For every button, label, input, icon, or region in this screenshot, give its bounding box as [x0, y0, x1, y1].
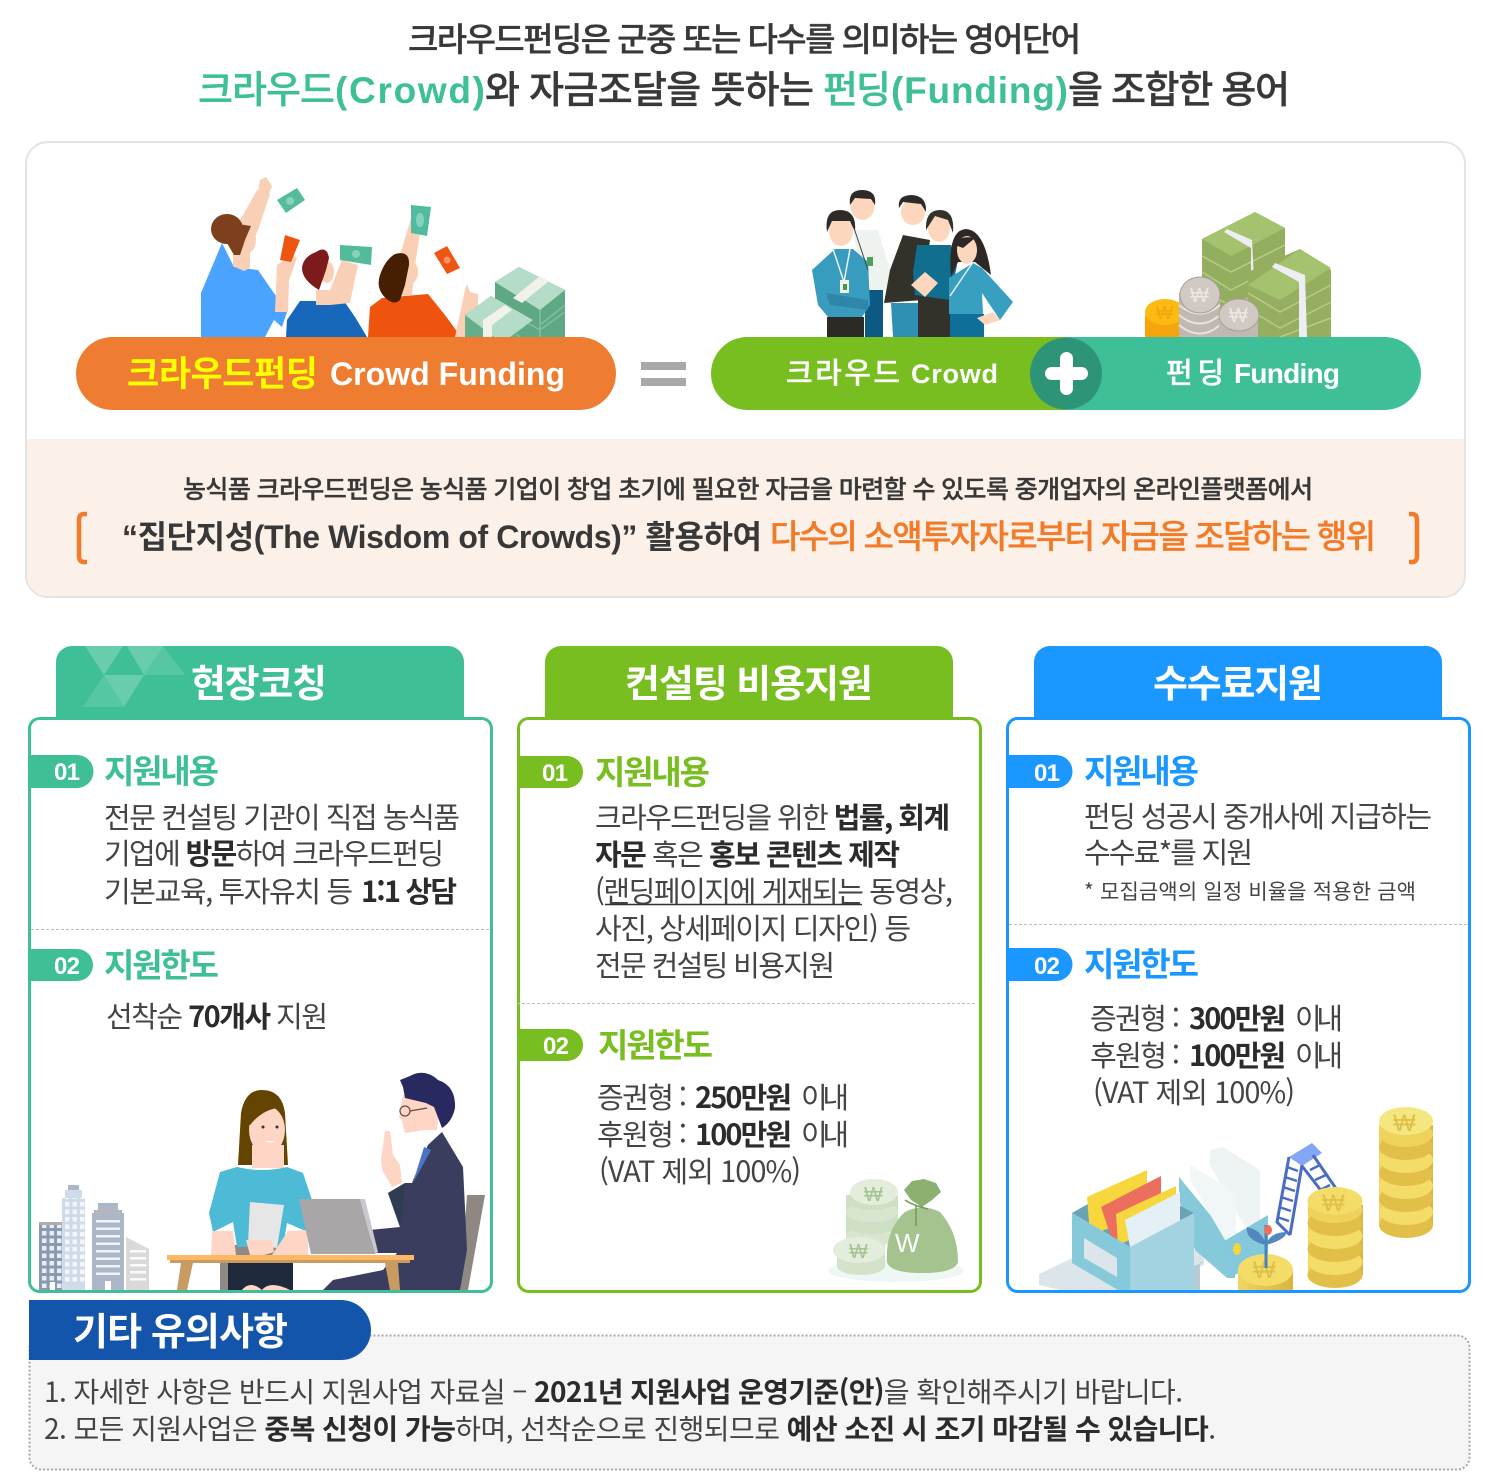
panel: consulting cost: 전문 컨설팅 비용지원 [595, 943, 835, 985]
panel: other notes [30, 1336, 1470, 1470]
illustration: crowd raising money [201, 177, 565, 337]
pill: crowd funding: Crowd Funding [330, 356, 565, 392]
definition text: 다수의 소액투자자로부터 자금을 조달하는 행위 [770, 518, 1376, 555]
panel: consulting cost [517, 646, 980, 1292]
panel: field coaching: 지원내용 [104, 753, 219, 790]
pill: crowd plus funding [711, 337, 1421, 410]
panel: consulting cost: 자문 혹은 홍보 콘텐츠 제작 [595, 832, 900, 874]
illustration: document box, ladder and coins: ₩ [1393, 1110, 1416, 1137]
panel: other notes: 1. 자세한 사항은 반드시 지원사업 자료실 – 2021년 지원사업 운영기준(안)을 확인해주시기 바랍니다. [44, 1371, 1183, 1411]
panel: consulting cost: 후원형 : [597, 1112, 687, 1154]
panel: definition [26, 142, 1465, 597]
panel: fee support: 이내 [1295, 996, 1343, 1038]
title: 와 자금조달을 뜻하는 [485, 70, 814, 112]
heading: other notes [29, 1300, 371, 1360]
panel: field coaching: 전문 컨설팅 기관이 직접 농식품 [104, 795, 460, 837]
panel: fee support: 증권형 : [1090, 996, 1180, 1038]
panel: consulting cost: 사진, 상세페이지 디자인) 등 [595, 906, 911, 948]
illustration: buildings [39, 1185, 149, 1290]
panel: fee support: 후원형 : [1090, 1033, 1180, 1075]
panel: fee support [1008, 646, 1470, 1292]
title: 크라우드펀딩은 군중 또는 다수를 의미하는 영어단어 [408, 21, 1081, 58]
panel: field coaching [30, 646, 492, 1292]
pill: crowd plus funding: 크라우드 [786, 358, 900, 390]
panel: fee support: 02 [1034, 953, 1060, 980]
panel: consulting cost: (랜딩페이지에 게재되는 동영상, [595, 869, 953, 911]
illustration: coins and bills [1145, 212, 1331, 337]
illustration: coins and bills: ₩ [1156, 303, 1173, 323]
panel: consulting cost: 컨설팅 비용지원 [625, 664, 873, 706]
panel: consulting cost: 크라우드펀딩을 위한 법률, 회계 [595, 795, 950, 837]
panel: consulting cost: 01 [542, 760, 568, 787]
illustration: money bag and coins [828, 1179, 964, 1282]
heading: other notes: 기타 유의사항 [73, 1312, 288, 1354]
title: 을 조합한 용어 [1068, 70, 1290, 112]
illustration: team of people [812, 190, 1013, 337]
illustration: document box, ladder and coins: ₩ [1322, 1190, 1345, 1217]
title: 크라우드 [198, 70, 335, 112]
panel: fee support: 이내 [1295, 1033, 1343, 1075]
panel: fee support: * 모집금액의 일정 비율을 적용한 금액 [1084, 876, 1416, 906]
illustration: document box, ladder and coins [1039, 1107, 1433, 1290]
panel: consulting cost: 이내 [801, 1075, 849, 1117]
definition text: 농식품 크라우드펀딩은 농식품 기업이 창업 초기에 필요한 자금을 마련할 수 있도록 중개업자의 온라인플랫폼에서 [183, 476, 1313, 504]
panel: consulting cost: (VAT 제외 100%) [599, 1149, 801, 1191]
panel: field coaching: 02 [54, 953, 80, 980]
panel: consulting cost: 지원내용 [595, 754, 710, 791]
panel: consulting cost: 이내 [801, 1112, 849, 1154]
panel: consulting cost: 증권형 : [597, 1075, 687, 1117]
pill: crowd plus funding: Crowd [911, 359, 998, 389]
panel: fee support: 지원한도 [1084, 946, 1199, 983]
panel: field coaching: 기본교육, 투자유치 등 [104, 869, 353, 911]
panel: consulting cost: 지원한도 [598, 1027, 713, 1064]
pill: crowd funding [76, 337, 616, 410]
panel: field coaching: 현장코칭 [191, 664, 327, 706]
panel: consulting cost: 100만원 [695, 1112, 792, 1154]
definition text [79, 476, 1417, 562]
panel: field coaching: 선착순 70개사 지원 [106, 994, 328, 1036]
illustration: money bag and coins: ₩ [864, 1184, 883, 1206]
panel: other notes: 2. 모든 지원사업은 중복 신청이 가능하며, 선착순으로 진행되므로 예산 소진 시 조기 마감될 수 있습니다. [44, 1408, 1216, 1448]
panel: consulting cost: 02 [543, 1033, 569, 1060]
illustration: coins and bills: ₩ [1229, 305, 1248, 327]
title: 펀딩 [823, 70, 891, 112]
illustration: consultant meeting [167, 1073, 485, 1290]
panel: field coaching: 기업에 방문하여 크라우드펀딩 [104, 831, 444, 873]
illustration: coins and bills: ₩ [1190, 285, 1209, 307]
definition text: “집단지성(The Wisdom of Crowds)” 활용하여 [122, 519, 762, 555]
panel: fee support: 펀딩 성공시 중개사에 지급하는 [1084, 794, 1432, 836]
panel: consulting cost: 250만원 [695, 1075, 792, 1117]
panel: fee support: (VAT 제외 100%) [1093, 1070, 1295, 1112]
pill: crowd funding: 크라우드펀딩 [127, 355, 318, 394]
pill: crowd plus funding: Funding [1234, 358, 1340, 389]
title [198, 21, 1290, 112]
panel: field coaching: 지원한도 [104, 947, 219, 984]
illustration: money bag and coins: ₩ [849, 1241, 868, 1263]
panel: fee support: 01 [1034, 760, 1060, 787]
panel: field coaching: 1:1 상담 [361, 869, 457, 911]
panel: fee support: 100만원 [1189, 1033, 1286, 1075]
icon: equals [641, 362, 686, 386]
panel: fee support: 수수료*를 지원 [1084, 830, 1253, 872]
panel: fee support: 수수료지원 [1153, 664, 1323, 706]
panel: field coaching: 01 [54, 759, 80, 786]
title: (Crowd) [335, 70, 485, 111]
panel: fee support: 지원내용 [1084, 753, 1199, 790]
illustration: money bag and coins: W [895, 1228, 920, 1258]
pill: crowd plus funding: 펀딩 [1166, 357, 1224, 390]
title: (Funding) [891, 70, 1068, 111]
panel: fee support: 300만원 [1189, 996, 1286, 1038]
illustration: document box, ladder and coins: ₩ [1253, 1257, 1276, 1284]
